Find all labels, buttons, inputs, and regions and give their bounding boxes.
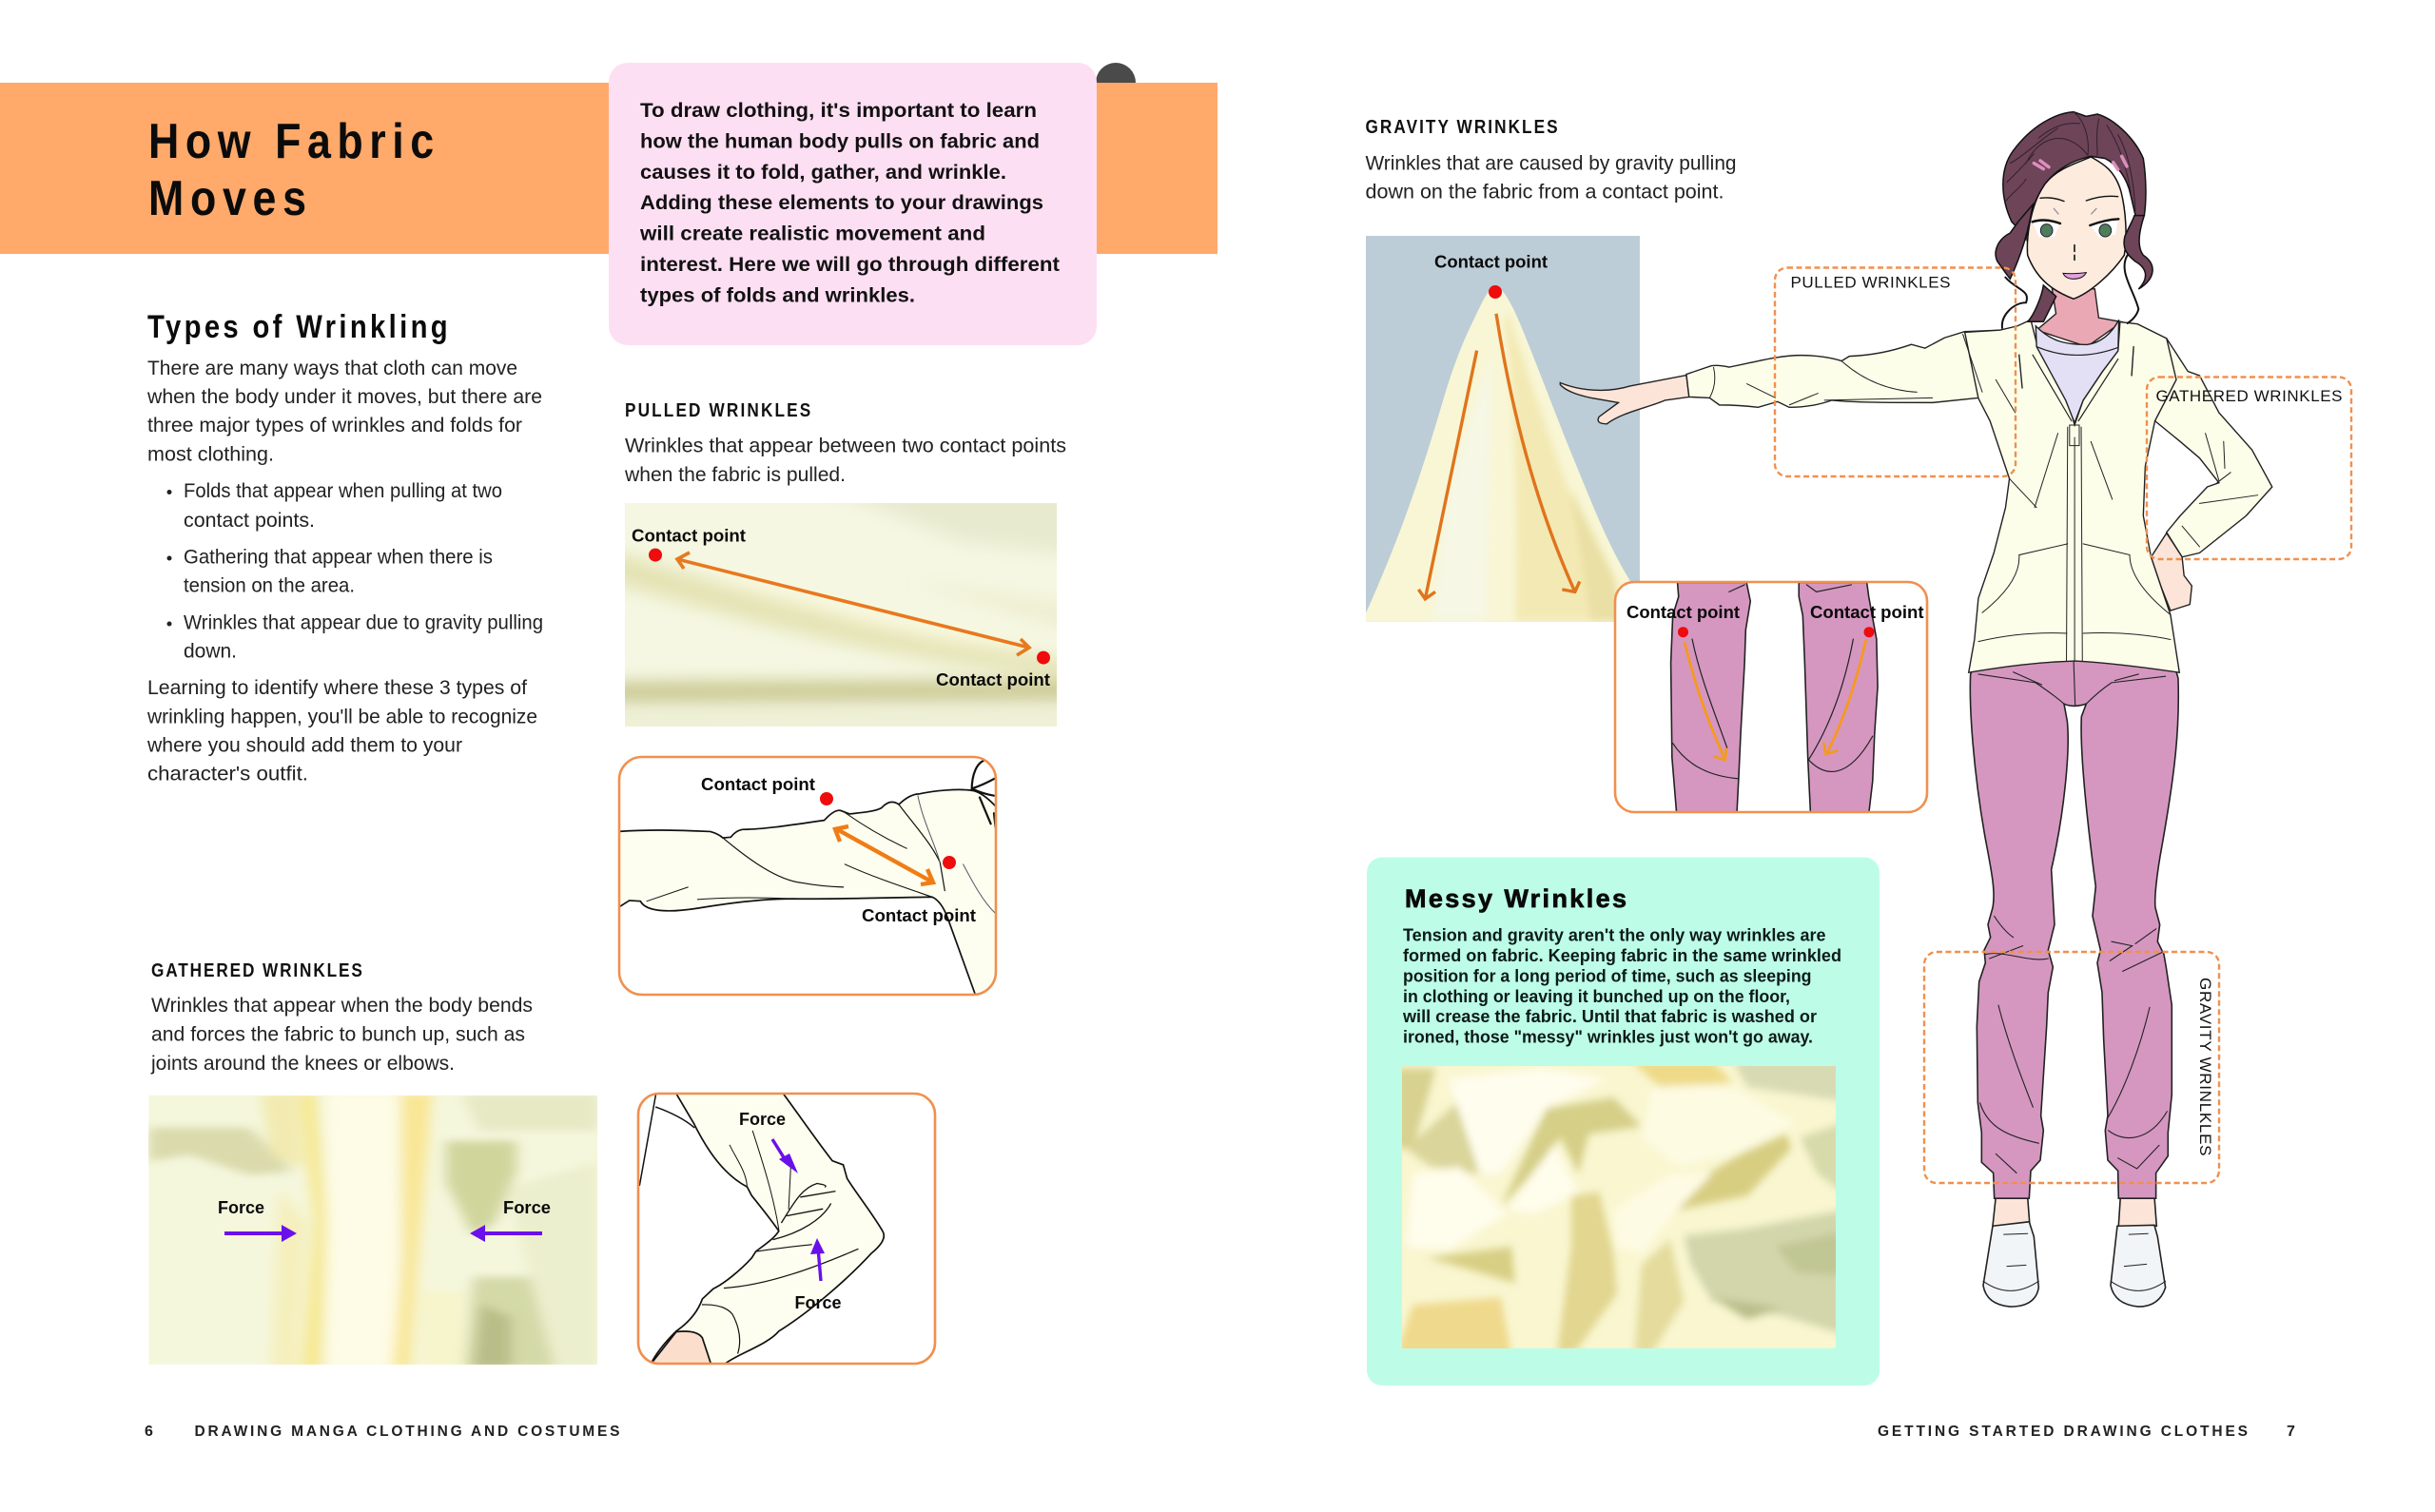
arrow head: force upward — [810, 1238, 825, 1254]
text block: types of wrinkling: down. — [184, 639, 237, 662]
panel: arm drawing pulled — [618, 757, 997, 997]
footer: left page: 6 — [145, 1424, 153, 1440]
footer: right page: GETTING STARTED DRAWING CLOTHES — [1878, 1424, 2248, 1440]
arrow: force right — [224, 1225, 297, 1242]
heading: types of wrinkling: Types of Wrinkling — [147, 308, 448, 345]
text block: types of wrinkling: character's outfit. — [147, 763, 308, 785]
text block: types of wrinkling: tension on the area. — [184, 574, 355, 597]
text block: types of wrinkling: contact points. — [184, 509, 315, 532]
panel: leg drawing gravity: Contact point — [1627, 602, 1740, 622]
panel: intro callout: To draw clothing, it's important to learn — [640, 99, 1037, 122]
arrows: gravity pull — [1418, 314, 1580, 599]
text block: types of wrinkling: Wrinkles that appear due to gravity pulling — [184, 611, 543, 633]
arrow: pull direction — [677, 552, 1029, 655]
text: gathered wrinkles description: joints around the knees or elbows. — [150, 1052, 455, 1075]
text block: types of wrinkling: wrinkling happen, you'll be able to recognize — [146, 705, 537, 727]
title — [148, 114, 434, 226]
text: gravity wrinkles description — [1366, 152, 1737, 204]
text block: types of wrinkling: There are many ways that cloth can move — [147, 357, 517, 379]
title: Moves — [148, 171, 306, 226]
footer: right page: 7 — [2287, 1424, 2295, 1440]
panel: leg drawing gravity: Contact point — [1810, 602, 1923, 622]
arrow: force left — [470, 1225, 542, 1242]
panel: elbow drawing gathered — [638, 1094, 935, 1365]
panel: arm drawing pulled: Contact point — [862, 905, 976, 925]
text block: types of wrinkling: where you should add them to your — [146, 734, 462, 757]
panel: intro callout: interest. Here we will go through different — [640, 253, 1060, 276]
page tab — [1096, 63, 1136, 83]
text: gathered wrinkles description: Wrinkles that appear when the body bends — [151, 994, 533, 1017]
panel: intro callout — [609, 63, 1097, 345]
arrows: gravity on legs — [1685, 639, 1866, 760]
arrow: force upward — [818, 1248, 821, 1281]
text block: types of wrinkling: when the body under it moves, but there are — [146, 385, 542, 408]
footer: left page: DRAWING MANGA CLOTHING AND COSTUMES — [194, 1424, 620, 1440]
photo: pulled fabric — [625, 503, 1057, 727]
photo: gathered fabric — [148, 1094, 598, 1368]
panel: intro callout: Adding these elements to your drawings — [640, 191, 1043, 214]
heading: gathered wrinkles: GATHERED WRINKLES — [151, 960, 362, 980]
character upper body — [1963, 289, 2272, 672]
photo: messy wrinkled fabric — [1395, 1061, 1842, 1356]
arrow: force downward — [772, 1139, 789, 1162]
text: messy wrinkles body: Tension and gravity aren't the only way wrinkles are — [1403, 926, 1826, 945]
panel: intro callout: how the human body pulls on fabric and — [640, 129, 1040, 152]
callout: pulled wrinkles region: PULLED WRINKLES — [1790, 274, 1950, 291]
photo: draped fabric cone — [1366, 236, 1640, 622]
text block: types of wrinkling: Learning to identify where these 3 types of — [147, 676, 527, 699]
panel: elbow drawing gathered: Force — [795, 1292, 841, 1312]
text: messy wrinkles body — [1402, 926, 1841, 1047]
text: pulled wrinkles description: Wrinkles that appear between two contact points — [625, 435, 1066, 457]
text: gathered wrinkles description: and forces the fabric to bunch up, such as — [151, 1023, 525, 1046]
text: gravity wrinkles description: Wrinkles that are caused by gravity pulling — [1366, 152, 1737, 175]
text: messy wrinkles body: will crease the fabric. Until that fabric is washed or — [1402, 1007, 1817, 1026]
text: messy wrinkles body: formed on fabric. Keeping fabric in the same wrinkled — [1403, 946, 1841, 965]
character arm and hand — [1560, 330, 2018, 424]
text block: types of wrinkling: Gathering that appear when there is — [184, 546, 493, 569]
photo: gathered fabric: Force — [503, 1197, 551, 1217]
photo: draped fabric cone: Contact point — [1434, 252, 1548, 272]
panel: intro callout: causes it to fold, gather, and wrinkle. — [640, 161, 1006, 184]
heading: messy wrinkles: Messy Wrinkles — [1405, 884, 1627, 913]
callout: gathered wrinkles region — [2147, 377, 2351, 559]
callout: gathered wrinkles region: GATHERED WRINKLES — [2155, 387, 2342, 405]
heading: gravity wrinkles: GRAVITY WRINKLES — [1366, 116, 1558, 137]
character illustration — [1560, 112, 2272, 1307]
text block: types of wrinkling — [146, 357, 543, 785]
panel: intro callout: types of folds and wrinkles. — [640, 283, 915, 306]
text: gathered wrinkles description — [150, 994, 533, 1075]
arrow: pull direction on sleeve — [835, 826, 933, 884]
text: pulled wrinkles description — [624, 435, 1066, 486]
text: messy wrinkles body: ironed, those "messy" wrinkles just won't go away. — [1403, 1028, 1813, 1047]
text: gravity wrinkles description: down on the fabric from a contact point. — [1366, 181, 1724, 204]
text block: types of wrinkling: three major types of wrinkles and folds for — [147, 414, 522, 436]
title: How Fabric — [148, 114, 434, 169]
panel: intro callout: will create realistic movement and — [639, 223, 985, 245]
text: pulled wrinkles description: when the fabric is pulled. — [624, 463, 846, 486]
text: messy wrinkles body: in clothing or leaving it bunched up on the floor, — [1403, 987, 1790, 1006]
photo: pulled fabric: Contact point — [936, 669, 1050, 689]
photo: gathered fabric: Force — [218, 1197, 264, 1217]
panel: arm drawing pulled: Contact point — [701, 774, 815, 794]
text block: types of wrinkling: most clothing. — [147, 442, 274, 465]
callout: gravity wrinkles region — [1924, 952, 2219, 1183]
panel: elbow drawing gathered: Force — [739, 1109, 786, 1129]
callout: gravity wrinkles region: GRAVITY WRINLKLES — [2196, 978, 2214, 1156]
callout: pulled wrinkles region — [1775, 268, 2016, 476]
text block: types of wrinkling: Folds that appear when pulling at two — [184, 479, 502, 502]
panel: leg drawing gravity — [1615, 582, 1927, 814]
header band — [0, 83, 1218, 254]
character legs and shoes — [1970, 655, 2178, 1307]
character head — [1996, 112, 2153, 328]
arrow head: force downward — [779, 1153, 798, 1173]
heading: pulled wrinkles: PULLED WRINKLES — [625, 399, 810, 420]
photo: pulled fabric: Contact point — [632, 525, 746, 546]
text: messy wrinkles body: position for a long period of time, such as sleeping — [1403, 966, 1811, 985]
panel: messy wrinkles — [1367, 858, 1880, 1386]
